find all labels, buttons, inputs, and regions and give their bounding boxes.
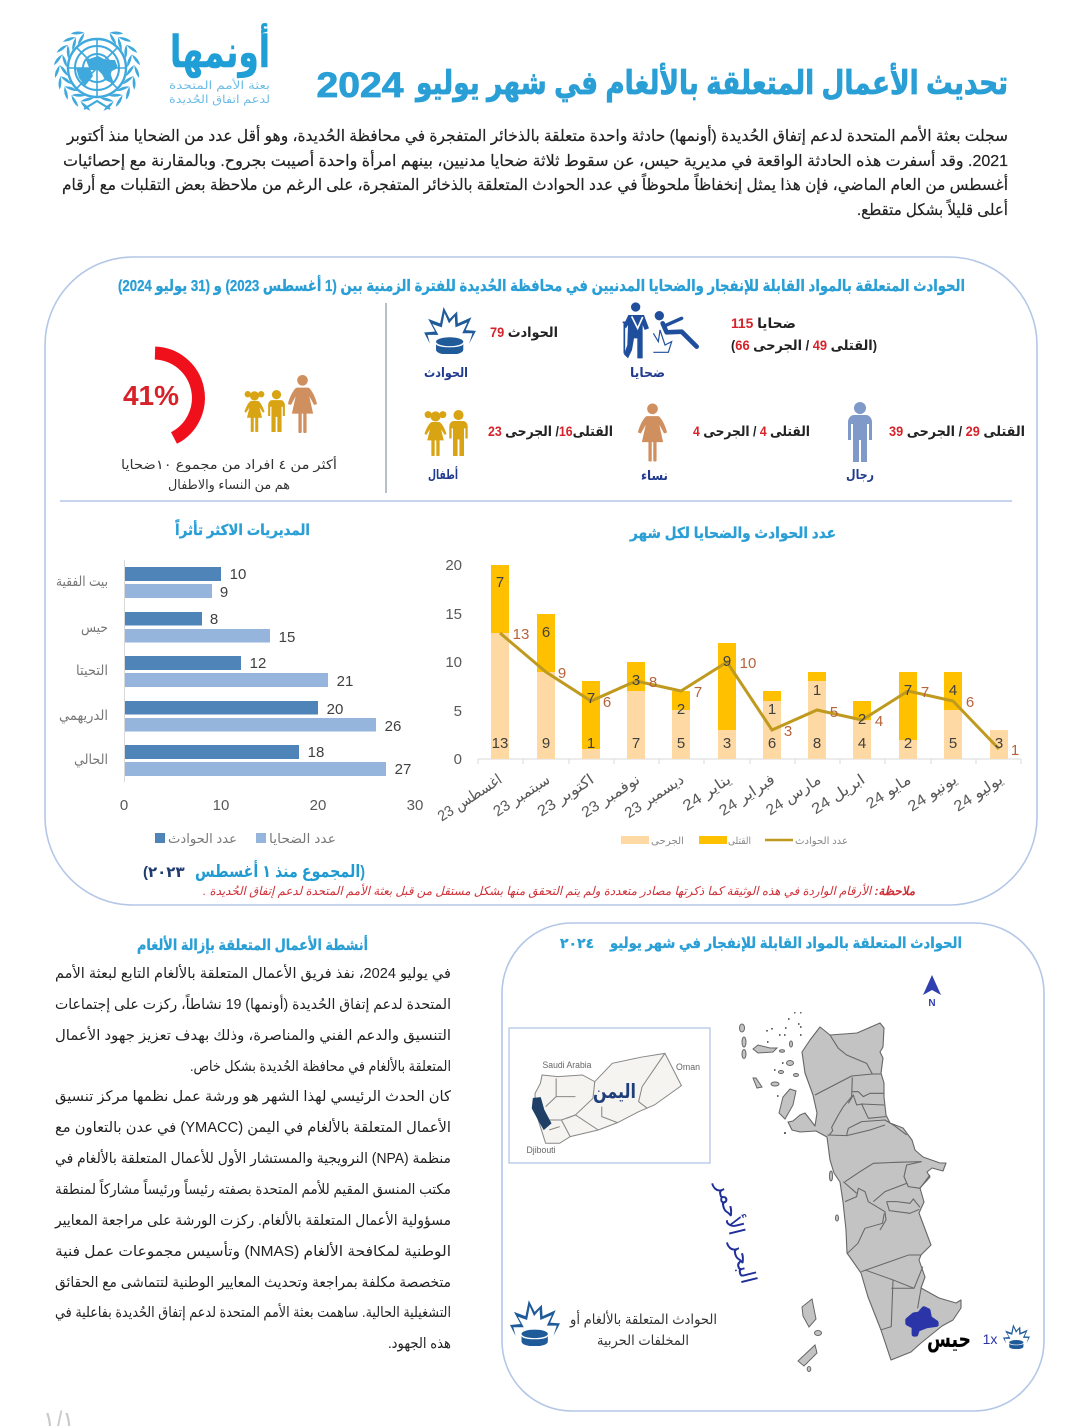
legend: explosive incidents: المخلفات الحربية [597, 1332, 689, 1349]
activities text: المتحدة لدعم إتفاق الحُديدة (أونمها) 19 نشاطاً، ركزت على إجتماعات [55, 994, 451, 1013]
legend: monthly chart [621, 836, 848, 847]
inset map: Yemen: Oman [676, 1062, 700, 1072]
chart: monthly incidents and victims: ديسمبر 23 [622, 771, 687, 822]
icon: north arrow [923, 975, 941, 1009]
legend: monthly chart: القتلى [728, 836, 751, 847]
chart: monthly incidents and victims: يناير 24 [680, 771, 734, 815]
chart: monthly incidents and victims: 8 [813, 735, 821, 752]
stat: men: القتلى 29 / الجرحى 39 [889, 423, 1025, 440]
chart: monthly incidents and victims: 2 [858, 711, 866, 728]
legend: explosive incidents [510, 1300, 717, 1349]
chart: monthly incidents and victims: 6 [966, 694, 974, 711]
chart: monthly incidents and victims: 3 [784, 723, 792, 740]
title: 2024 [316, 66, 404, 105]
chart: most affected districts: 18 [308, 744, 324, 761]
map heading: ٢٠٢٤ [560, 935, 594, 951]
chart: monthly incidents and victims: 6 [542, 624, 550, 641]
chart: monthly incidents and victims: 7 [904, 682, 912, 699]
chart: monthly incidents and victims: 7 [587, 690, 595, 707]
chart: monthly incidents and victims: نوفمبر 23 [579, 771, 643, 821]
intro paragraph [62, 125, 1008, 220]
share caption: أكثر من ٤ افراد من مجموع ١٠ضحايا [121, 456, 337, 473]
chart: monthly incidents and victims: 7 [694, 684, 702, 701]
activities text: مسؤولية الأعمال المتعلقة بالألغام. ركزت الورشة على مراجعة المعايير [54, 1211, 451, 1229]
chart: monthly incidents and victims: 5 [454, 703, 462, 720]
chart: monthly incidents and victims: 5 [677, 735, 685, 752]
chart: most affected districts: 21 [337, 673, 353, 690]
cumulative caption: (المجموع منذ ١ أغسطس [195, 860, 365, 882]
chart: most affected districts: الدريهمي [59, 707, 108, 724]
intro paragraph: أعلى قليلاً بشكل متقطع. [857, 199, 1008, 220]
label: men: رجال [846, 467, 874, 482]
activities text [54, 964, 451, 1352]
activities text: الأعمال المتعلقة بالألغام في اليمن (YMACC) في عدن بالتعاون مع [55, 1118, 451, 1136]
chart: monthly incidents and victims: 6 [768, 735, 776, 752]
chart: monthly incidents and victims: 7 [921, 684, 929, 701]
chart: monthly incidents and victims: 5 [830, 704, 838, 721]
activities heading: أنشطة الأعمال المتعلقة بإزالة الألغام [137, 935, 368, 954]
chart: monthly incidents and victims: 7 [632, 735, 640, 752]
share caption [121, 456, 337, 493]
chart: monthly incidents and victims: 4 [949, 682, 957, 699]
chart: monthly incidents and victims: 10 [445, 654, 462, 671]
activities text: هذه الجهود. [388, 1336, 451, 1352]
cumulative caption [143, 860, 365, 882]
chart: most affected districts: 10 [213, 797, 229, 814]
logo: UNMHA wordmark: بعثة الأمم المتحدة [169, 78, 270, 92]
chart: most affected districts: حيس [81, 619, 108, 636]
intro paragraph: سجلت بعثة الأمم المتحدة لدعم إتفاق الحُديدة (أونمها) حادثة واحدة متعلقة بالذخائر المتفجرة في محافظة الحُديدة، وهو أقل عدد من الضحايا منذ أكتوبر [66, 125, 1008, 146]
chart: monthly incidents and victims: 6 [603, 694, 611, 711]
chart: most affected districts: 20 [327, 701, 343, 718]
title [316, 62, 1008, 105]
activities text: في يوليو 2024، نفذ فريق الأعمال المتعلقة بالألغام التابع لبعثة الأمم [55, 964, 451, 982]
chart: monthly incidents and victims: 1 [1011, 742, 1019, 759]
legend: district chart [155, 831, 336, 847]
chart: most affected districts: 8 [210, 611, 218, 628]
stat: victims 115: (القتلى 49 / الجرحى 66) [731, 337, 877, 354]
legend: monthly chart: الجرحى [651, 836, 684, 847]
intro paragraph: أغسطس من العام الماضي، فإن هذا يمثل إنخفاظاً ملحوظاً في عدد الحوادث المتعلقة بالذخائر المتفجرة، على الرغم من ملاحظة بعض التقلبات مع أرقام [62, 172, 1008, 195]
marker: one incident: 1x [983, 1331, 997, 1347]
chart: monthly incidents and victims: ابريل 24 [809, 771, 868, 818]
map: islands [740, 1012, 838, 1372]
chart: most affected districts: التحيتا [76, 662, 108, 678]
inset map: Yemen: Djibouti [526, 1145, 556, 1155]
chart: monthly incidents and victims: 4 [858, 735, 866, 752]
panel: map of July incidents [502, 923, 1044, 1411]
chart: monthly incidents and victims: 2 [904, 735, 912, 752]
chart: monthly incidents and victims: 4 [875, 713, 883, 730]
inset map: Yemen: اليمن [593, 1081, 636, 1103]
icon: incidents [424, 307, 476, 355]
chart: most affected districts: 26 [385, 718, 401, 735]
legend: district chart: عدد الضحايا [269, 831, 336, 846]
chart: most affected districts: 0 [120, 797, 128, 814]
inset map: Yemen: Saudi Arabia [542, 1060, 592, 1070]
chart: most affected districts [56, 560, 423, 847]
chart: monthly incidents and victims: 13 [492, 735, 508, 752]
chart: monthly incidents and victims: 3 [995, 735, 1003, 752]
chart: most affected districts: 20 [310, 797, 326, 814]
chart: monthly incidents and victims: 9 [723, 653, 731, 670]
stat: incidents 79: الحوادث 79 [490, 324, 558, 341]
legend: district chart: عدد الحوادث [168, 831, 237, 847]
activities text: متخصصة مكلفة بمراجعة وتحديث المعايير الوطنية لتتماشى مع الحقائق [55, 1275, 451, 1291]
stat: victims 115: ضحايا 115 [731, 315, 796, 331]
stat: victims 115 [731, 315, 877, 354]
chart: monthly incidents and victims: 3 [723, 735, 731, 752]
chart: monthly incidents and victims: يونيو 24 [905, 771, 960, 815]
chart: monthly incidents and victims: مايو 24 [863, 771, 914, 813]
chart: most affected districts: 27 [395, 761, 411, 778]
intro paragraph: 2021. وقد أسفرت هذه الحادثة الواقعة في مديرية حيس، عن سقوط ثلاثة ضحايا مدنيين، بينهم امرأة واحدة أصيبت بجروح. وبالمقارنة مع إحصائيات [63, 150, 1008, 171]
chart: monthly incidents and victims: 5 [949, 735, 957, 752]
chart: monthly incidents and victims: فبراير 24 [716, 771, 778, 820]
panel heading: الحوادث المتعلقة بالمواد القابلة للإنفجار والضحايا المدنيين في محافظة الحُديدة للفترة الزمنية بين (1 أغسطس 2023) و (31 يوليو 2024) [118, 275, 965, 296]
cumulative caption: (٢٠٢٣ [143, 864, 185, 881]
chart: monthly incidents and victims: 10 [740, 655, 756, 672]
chart: most affected districts: 30 [407, 797, 423, 814]
chart: monthly incidents and victims: 3 [632, 672, 640, 689]
chart: monthly incidents and victims: 13 [513, 626, 529, 643]
marker: one incident [983, 1324, 1030, 1349]
label: Hays district: حيس [927, 1326, 971, 1353]
label: children: أطفال [428, 466, 458, 482]
chart: monthly incidents and victims: 7 [496, 574, 504, 591]
activities section [54, 935, 451, 1352]
stat: children: القتلى16/ الجرحى 23 [488, 423, 613, 440]
icon: north arrow: N [928, 998, 936, 1009]
monthly chart heading: عدد الحوادث والضحايا لكل شهر [629, 525, 836, 542]
icon: children [424, 410, 468, 456]
chart: monthly incidents and victims: 9 [558, 665, 566, 682]
donut gauge 41%: 41% [123, 380, 179, 411]
chart: most affected districts: 15 [279, 629, 295, 646]
activities text: الوطنية لمكافحة الألغام (NMAS) وتأسيس مجموعات عمل فنية [55, 1241, 451, 1260]
chart: monthly incidents and victims: اغسطس 23 [435, 771, 505, 825]
donut gauge 41% [123, 353, 198, 438]
panel: statistics and charts [45, 257, 1037, 905]
share caption: هم من النساء والاطفال [168, 477, 290, 493]
chart: monthly incidents and victims: 15 [445, 606, 462, 623]
activities text: التنسيق والدعم الفني والمناصرة، وذلك بهدف تعزيز جهود الأعمال [55, 1026, 451, 1044]
chart: monthly incidents and victims: 8 [649, 674, 657, 691]
map heading: الحوادث المتعلقة بالمواد القابلة للإنفجار في شهر يوليو [609, 935, 962, 952]
chart: most affected districts: 12 [250, 655, 266, 672]
district chart heading: المديريات الاكثر تأثراً [175, 519, 310, 539]
chart: most affected districts: 9 [220, 584, 228, 601]
legend: explosive incidents: الحوادث المتعلقة بالألغام أو [569, 1310, 717, 1328]
label: Red Sea: البحر الأحمر [712, 1177, 762, 1286]
chart: most affected districts: 10 [230, 566, 246, 583]
label: victims: ضحايا [630, 365, 665, 380]
chart: monthly incidents and victims: اكتوبر 23 [534, 771, 597, 820]
chart: monthly incidents and victims: 1 [587, 735, 595, 752]
logo: UNMHA wordmark: لدعم اتفاق الحُديدة [169, 94, 270, 106]
chart: monthly incidents and victims: سبتمبر 23 [490, 771, 553, 820]
activities text: المتعلقة بالألغام في محافظة الحُديدة بشكل خاص. [190, 1057, 451, 1075]
activities text: كان الحدث الرئيسي لهذا الشهر هو ورشة عمل نظمها مركز تنسيق [55, 1089, 451, 1105]
activities text: التشغيلية الحالية. ساهمت بعثة الأمم المتحدة لدعم إتفاق الحُديدة بفاعلية في [55, 1303, 451, 1321]
chart: monthly incidents and victims: 1 [768, 701, 776, 718]
chart: monthly incidents and victims: 2 [677, 701, 685, 718]
disclaimer note: ملاحظة: الأرقام الواردة في هذه الوثيقة كما ذكرتها مصادر متعددة ولم يتم التحقق منها بشكل مستقل من قبل بعثة الأمم المتحدة لدعم إتفاق الحُديدة . [203, 883, 916, 898]
chart: monthly incidents and victims: 0 [454, 751, 462, 768]
stat: women: القتلى 4 / الجرحى 4 [693, 423, 810, 440]
label: women: نساء [641, 468, 668, 483]
legend: monthly chart: عدد الحوادث [795, 836, 848, 847]
chart: monthly incidents and victims: مارس 24 [763, 771, 824, 819]
icon: victims [623, 302, 697, 358]
chart: most affected districts: بيت الفقية [56, 573, 108, 589]
chart: monthly incidents and victims: 20 [445, 557, 462, 574]
chart: monthly incidents and victims [435, 557, 1021, 847]
chart: monthly incidents and victims: يوليو 24 [951, 771, 1006, 815]
activities text: منظمة (NPA) النرويجية والمستشار الأول للأعمال المتعلقة بالألغام في [55, 1149, 451, 1167]
activities text: مكتب المنسق المقيم للأمم المتحدة بصفته رئيساً ورئيساً مشاركاً لمنطقة [55, 1179, 451, 1198]
map: Al Hudaydah governorate districts [788, 1023, 961, 1360]
label: incidents: الحوادث [424, 365, 468, 380]
inset map: Yemen [509, 1028, 710, 1163]
logo: UNMHA wordmark: أونمها [170, 23, 270, 78]
chart: most affected districts: الحالي [74, 751, 108, 768]
district: Hays highlighted [908, 1309, 936, 1334]
chart: monthly incidents and victims: 9 [542, 735, 550, 752]
logo: UN emblem [53, 27, 141, 111]
icon: men [848, 402, 872, 462]
logo: UNMHA wordmark [169, 23, 270, 106]
icon: women [638, 404, 667, 462]
chart: monthly incidents and victims: 1 [813, 682, 821, 699]
icon: women and children [244, 375, 317, 433]
